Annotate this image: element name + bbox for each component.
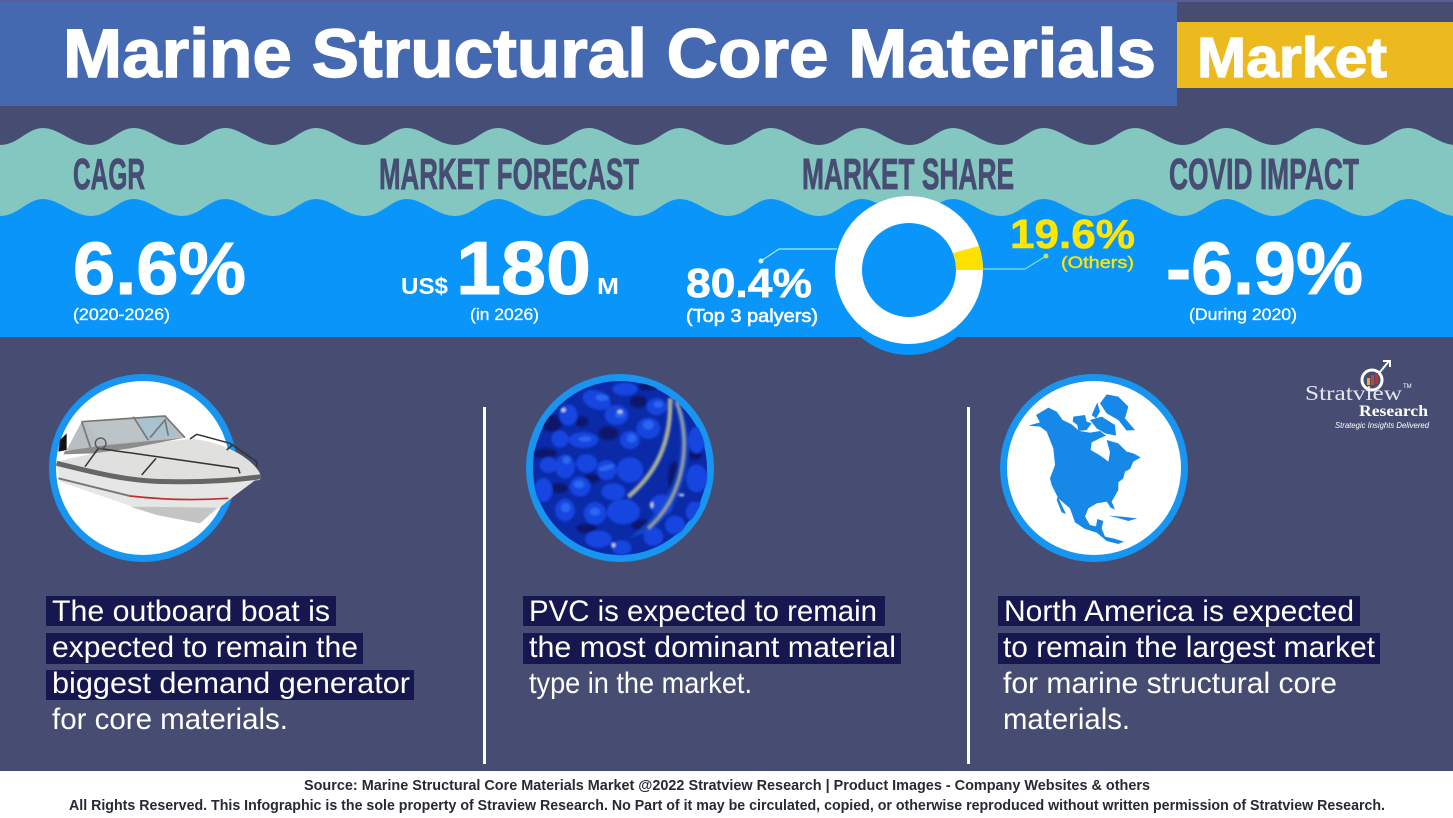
logo: Stratview Research: TM (1403, 384, 1412, 390)
stat: top 3 players (686, 260, 818, 326)
text block: outboard boat: expected to remain the (52, 631, 358, 664)
divider: right (967, 407, 970, 764)
text block: North America: materials. (1003, 703, 1130, 736)
stat: CAGR: 6.6% (73, 227, 246, 310)
logo: Stratview Research: Strategic Insights Delivered (1335, 421, 1430, 430)
stat: market forecast: US$ (401, 273, 448, 299)
text block: outboard boat: for core materials. (52, 703, 288, 736)
text block: North America: to remain the largest market (1003, 631, 1376, 664)
donut segment: others (953, 246, 983, 270)
stat: CAGR: (2020-2026) (73, 306, 170, 324)
footer: source and rights: All Rights Reserved. This Infographic is the sole property of Straview Research. No Part of it may be circulated, copied, or otherwise reproduced without written permission of Stratview Research. (69, 798, 1385, 814)
footer: source and rights (0, 771, 1453, 818)
stat: others: 19.6% (1010, 211, 1135, 257)
heading: market forecast: MARKET FORECAST (379, 150, 639, 199)
logo: Stratview Research: Stratview (1305, 381, 1403, 405)
stat: covid impact: (During 2020) (1189, 306, 1297, 324)
text block: PVC: PVC is expected to remain (529, 595, 877, 628)
stat: market forecast: 180 (456, 226, 591, 310)
teal wave band (0, 128, 1453, 240)
stat: top 3 players: 80.4% (686, 260, 812, 306)
stat: others: (Others) (1061, 253, 1134, 272)
stat: market forecast: M (597, 273, 619, 299)
text block: North America: North America is expected (1004, 595, 1354, 628)
leader line: others (983, 254, 1048, 269)
logo: Stratview Research (1305, 361, 1430, 430)
title banner (0, 2, 1177, 106)
market tag (1177, 22, 1453, 90)
heading: CAGR: CAGR (73, 150, 145, 199)
footer: source and rights: Source: Marine Structural Core Materials Market @2022 Stratview Research | Product Images - Company Websites & others (304, 778, 1150, 794)
text block: North America (998, 595, 1380, 736)
icon: blue PVC pellets (530, 378, 710, 558)
text block: outboard boat: biggest demand generator (52, 667, 410, 700)
blue wave band (0, 199, 1453, 337)
text block: PVC: type in the market. (529, 667, 752, 700)
text block: outboard boat: The outboard boat is (52, 595, 330, 628)
stat: market forecast: (in 2026) (470, 306, 539, 324)
text block: North America: for marine structural core (1003, 667, 1337, 700)
text block: PVC: the most dominant material (529, 631, 896, 664)
stat: covid impact: -6.9% (1166, 227, 1363, 310)
text block: PVC (523, 595, 901, 700)
icon: North America map (1004, 378, 1184, 558)
text block: outboard boat (46, 595, 414, 736)
divider: left (483, 407, 486, 764)
heading: market share: MARKET SHARE (802, 150, 1014, 199)
stat: top 3 players: (Top 3 palyers) (686, 305, 818, 326)
icon: boat (52, 378, 261, 558)
leader line: top 3 players (758, 249, 837, 264)
market tag: Market (1197, 26, 1387, 90)
title banner: Marine Structural Core Materials (63, 15, 1156, 92)
stat: market forecast (401, 226, 619, 324)
donut chart: market share (835, 207, 983, 355)
logo: Stratview Research: Research (1359, 403, 1428, 420)
